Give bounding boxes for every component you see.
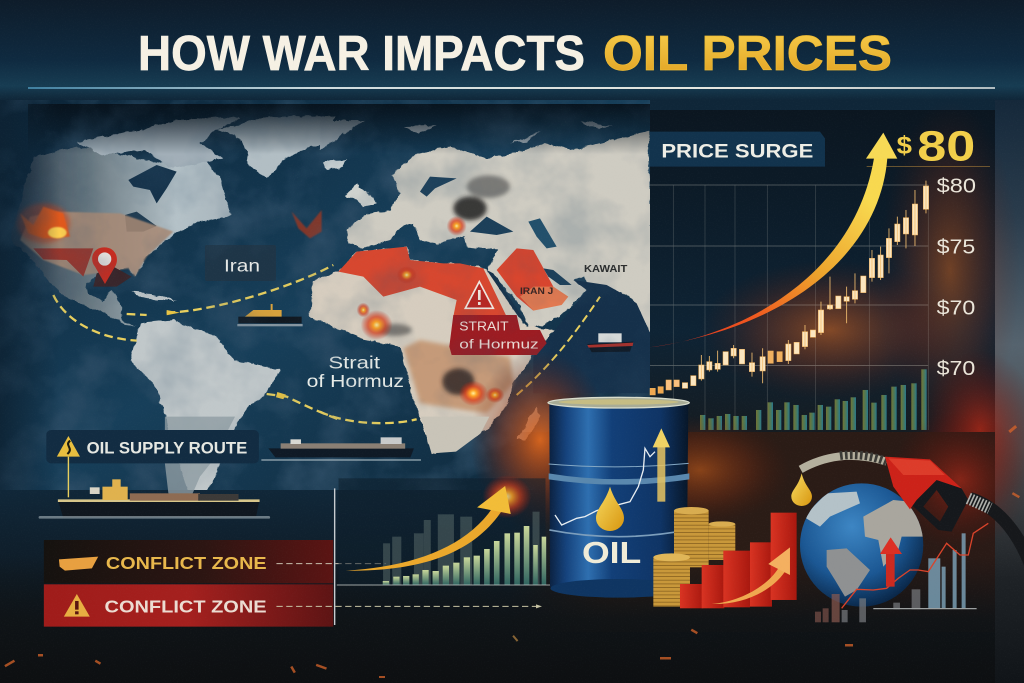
label: iran: [205, 245, 276, 281]
europe, africa, asia: [307, 120, 653, 455]
band: conflict zone dark: CONFLICT ZONE: [106, 553, 267, 573]
nozzle handle red: [885, 457, 962, 509]
mini chart with trend line: [815, 523, 988, 622]
fire: western north america: [17, 203, 70, 243]
title: [138, 27, 892, 81]
americas and greenland: [10, 117, 343, 500]
divider line: [333, 488, 337, 625]
small red up arrow: [880, 537, 902, 587]
tanker ship: [237, 304, 303, 326]
callout: strait of hormuz: of Hormuz: [459, 336, 539, 351]
fire: eastern europe: [447, 216, 467, 236]
label: strait of hormuz on map: [308, 356, 403, 387]
icon: warning triangle on map: [465, 282, 493, 308]
fuel nozzle: [801, 455, 1024, 563]
callout: strait of hormuz: [449, 315, 547, 355]
growth arrow: [346, 486, 511, 571]
route: arabian sea: [517, 297, 600, 395]
label: iran: Iran: [224, 255, 260, 275]
title: HOW WAR IMPACTS: [138, 27, 585, 81]
lower glow behind barrel: [0, 350, 1024, 683]
icon: oil drop: [596, 487, 624, 531]
band: conflict zone red: CONFLICT ZONE: [105, 597, 267, 617]
orange arrow: [712, 547, 790, 604]
fire: west africa: [357, 303, 412, 340]
title rule: [28, 87, 995, 89]
volume bars: [700, 369, 927, 430]
label: strait of hormuz on map: Strait: [328, 353, 380, 373]
oil barrel and cost icons: [548, 397, 1024, 622]
africa conflict shading: [403, 340, 513, 413]
label: oil supply route: [46, 430, 259, 463]
cargo ship arabian sea: [587, 333, 633, 352]
oil barrel: [548, 397, 689, 598]
highlighted conflict region: north africa: [338, 247, 507, 317]
large tanker ship: [39, 479, 270, 519]
heading: price surge: PRICE SURGE: [661, 142, 813, 163]
axis labels: $75: [937, 237, 975, 259]
title: OIL PRICES: [603, 27, 892, 81]
cargo ship near south africa: [261, 437, 421, 461]
globe: [800, 483, 927, 607]
axis labels: [937, 176, 976, 380]
mini chart: [337, 475, 550, 585]
smoke over eastern europe: [453, 175, 510, 220]
value: $80 headline: 80: [917, 123, 975, 171]
fire: north africa: [399, 268, 414, 282]
barrel label: OIL: [582, 536, 641, 570]
value: $80 headline: [897, 123, 975, 171]
barrel up arrow: [653, 428, 670, 502]
icon: dripping oil drop: [791, 473, 812, 506]
label: oil supply route: OIL SUPPLY ROUTE: [87, 439, 247, 457]
fire: atlantic: [292, 210, 322, 238]
axis labels: $70: [937, 298, 975, 320]
black hose: [970, 498, 1024, 563]
heading: price surge: [650, 132, 825, 167]
value: $80 headline: $: [897, 131, 912, 159]
icon: map pin: [92, 247, 117, 284]
axis labels: $70: [937, 358, 975, 380]
route: dashed shipping lane 2: [127, 265, 333, 315]
candlesticks: [650, 186, 929, 395]
south america tail: [165, 417, 235, 497]
sparks: [4, 425, 1020, 678]
label: iran j: IRAN J: [520, 286, 553, 296]
route: dashed shipping lane 3: [267, 392, 340, 420]
red bar chart: [680, 513, 797, 608]
highlighted conflict region: arabia: [497, 248, 568, 311]
barrel chart line: [555, 448, 655, 525]
band: conflict zone dark: [44, 540, 386, 583]
route: south atlantic: [320, 412, 417, 423]
label: strait of hormuz on map: of Hormuz: [307, 371, 404, 391]
coin stacks: [653, 507, 735, 607]
panel: oil supply route and conflict zone legend: [39, 417, 550, 627]
band: conflict zone red: [44, 584, 542, 627]
label: kawait: KAWAIT: [584, 264, 627, 275]
surge arrow: [650, 133, 897, 347]
south africa tip: [421, 417, 489, 453]
panel: price chart: [650, 100, 1024, 510]
panel: world map: [0, 100, 653, 500]
fire behind arrow: [482, 475, 531, 518]
nozzle handle black: [910, 480, 968, 532]
callout: strait of hormuz: STRAIT: [459, 320, 509, 334]
fire: central africa: [442, 368, 504, 406]
nozzle spout: [801, 456, 887, 469]
axis labels: $80: [937, 176, 976, 198]
route: dashed shipping lane 1: [53, 295, 137, 341]
